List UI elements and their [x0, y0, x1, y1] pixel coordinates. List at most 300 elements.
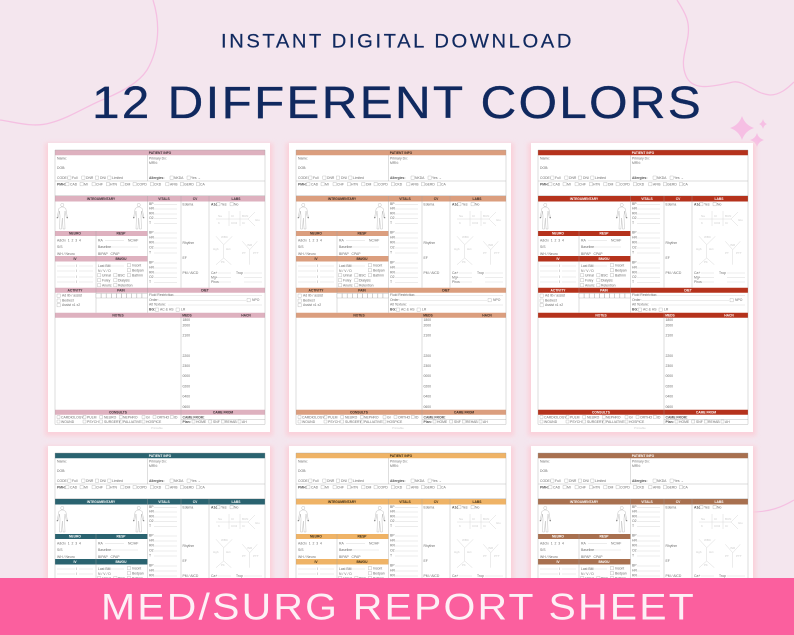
- form labels: [298, 460, 484, 580]
- form labels: PMH:: [57, 486, 66, 490]
- lab fishbone labels: Hgb: [213, 550, 219, 554]
- consults and plan: AH: [725, 420, 730, 424]
- form labels: O2: [390, 216, 395, 220]
- form labels: MRN:: [149, 161, 158, 165]
- form labels: BP: [632, 260, 637, 264]
- form labels: MI: [567, 486, 571, 490]
- form labels: O2: [149, 216, 154, 220]
- section headers: CV: [193, 197, 198, 201]
- form labels: Bathrm: [373, 274, 384, 278]
- lab fishbone labels: Glu: [496, 218, 501, 222]
- form labels: PM / AICD: [182, 271, 199, 275]
- form labels: BG:: [149, 308, 155, 312]
- form labels: DOB:: [540, 469, 548, 473]
- subtitle: INSTANT DIGITAL DOWNLOAD: [221, 30, 574, 52]
- form labels: HR: [149, 236, 154, 240]
- form labels: AC & HS: [401, 308, 415, 312]
- form labels: BIPAP CPAP: [98, 252, 120, 256]
- form labels: MI: [84, 486, 88, 490]
- lab fishbone labels: Glu: [738, 218, 743, 222]
- consults and plan: SURGERY: [587, 420, 604, 424]
- form labels: T: [632, 280, 634, 284]
- section headers: CV: [193, 500, 198, 504]
- section headers: BM/GU: [356, 257, 368, 261]
- form labels: BP: [390, 202, 395, 206]
- consults and plan: [61, 416, 247, 424]
- form labels: Phos: [211, 280, 219, 284]
- lab fishbone labels: Cr: [242, 221, 245, 225]
- lab fishbone labels: K: [459, 524, 461, 528]
- lab fishbone labels: Hct: [226, 550, 231, 554]
- report sheet: terracotta: [286, 143, 514, 436]
- section headers: IV: [73, 560, 77, 564]
- form labels: /: [559, 572, 560, 576]
- med times: [666, 318, 673, 409]
- form labels: DNR: [569, 479, 577, 483]
- report sheet: brick red: [528, 143, 756, 436]
- form labels: Last BM: [339, 264, 352, 268]
- form labels: Rhythm: [424, 544, 435, 548]
- form labels: NKDA: [657, 176, 667, 180]
- form labels: /: [559, 567, 560, 571]
- form labels: HR: [390, 538, 395, 542]
- consults and plan: ORTHO: [640, 416, 653, 420]
- form labels: NPO: [252, 298, 260, 302]
- form labels: DNI: [100, 176, 106, 180]
- lab fishbone labels: Hgb: [696, 550, 702, 554]
- form labels: HR: [632, 266, 637, 270]
- form labels: Retention: [359, 284, 374, 288]
- form labels: DOB:: [298, 166, 306, 170]
- lab fishbone labels: INR: [247, 243, 253, 247]
- form labels: Rhythm: [182, 544, 194, 548]
- form labels: O2: [390, 548, 395, 552]
- lab fishbone labels: Glu: [255, 218, 260, 222]
- lab fishbone labels: Cr: [242, 524, 245, 528]
- form labels: Edema: [182, 506, 193, 510]
- form labels: RA: [581, 238, 586, 242]
- consults and plan: WOUND: [61, 420, 75, 424]
- form labels: NKDA: [174, 479, 184, 483]
- form labels: /: [317, 264, 318, 268]
- form labels: BSC: [601, 274, 609, 278]
- form labels: RA: [339, 238, 344, 242]
- form labels: Foley: [102, 278, 111, 282]
- section headers: INTEGUMENTARY: [87, 197, 116, 201]
- form labels: No: [475, 202, 479, 206]
- lab fishbone labels: Cl: [714, 214, 717, 218]
- form labels: RR: [149, 212, 154, 216]
- section headers: INTEGUMENTARY: [87, 500, 116, 504]
- section headers: DIET: [201, 288, 209, 292]
- form labels: Fluid Restriction:: [632, 293, 657, 297]
- form labels: Last BM: [98, 264, 111, 268]
- section headers: CONSULTS: [592, 410, 611, 414]
- form labels: HR: [149, 510, 154, 514]
- title: 12 DIFFERENT COLORS: [92, 77, 703, 128]
- lab fishbone labels: Cl: [472, 517, 475, 521]
- lab fishbone labels: Hct: [467, 247, 472, 251]
- form labels: No: [717, 506, 721, 510]
- form labels: BP: [149, 534, 154, 538]
- report sheet: amber: [286, 446, 514, 581]
- med times: 2000: [182, 324, 190, 328]
- form labels: RR: [149, 240, 154, 244]
- lab fishbone labels: Plt: [462, 563, 466, 567]
- consults and plan: NEURO: [345, 416, 358, 420]
- section headers: INTEGUMENTARY: [328, 197, 357, 201]
- section headers: [552, 454, 724, 564]
- form labels: Limited: [112, 176, 123, 180]
- form labels: A1c: [452, 202, 458, 206]
- form labels: Ad lib / assist: [62, 294, 82, 298]
- form labels: BIPAP CPAP: [581, 555, 603, 559]
- banner text: MED/SURG REPORT SHEET: [101, 586, 696, 628]
- section headers: CAME FROM: [213, 410, 233, 414]
- form labels: COPD: [137, 182, 147, 186]
- form labels: Urinal: [343, 274, 352, 278]
- consults and plan: NEPHRO: [364, 416, 379, 420]
- lab fishbone labels: K: [701, 524, 703, 528]
- form labels: BP: [390, 505, 395, 509]
- form labels: CODE:: [540, 176, 551, 180]
- section headers: NEURO: [552, 232, 564, 236]
- consults and plan: GI: [629, 416, 633, 420]
- section headers: VITALS: [158, 197, 171, 201]
- form labels: T: [149, 554, 151, 558]
- form labels: Yes →: [191, 176, 201, 180]
- consults and plan: Plan:: [666, 420, 674, 424]
- consults and plan: SNF: [696, 420, 703, 424]
- form labels: Urinal: [585, 274, 594, 278]
- form labels: Primary Dx:: [149, 460, 167, 464]
- form labels: N / V / D: [339, 572, 352, 576]
- consults and plan: NEPHRO: [123, 416, 138, 420]
- lab fishbone labels: Cr: [483, 221, 486, 225]
- form labels: A1c: [211, 506, 217, 510]
- form labels: MRN:: [149, 464, 158, 468]
- form labels: CKD: [637, 486, 645, 490]
- section headers: CAME FROM: [454, 410, 474, 414]
- form labels: Incont: [615, 566, 624, 570]
- med times: 2100: [424, 334, 431, 338]
- decorative curve lower right: [752, 500, 794, 512]
- form labels: PM / AICD: [666, 574, 682, 578]
- form labels: Full: [313, 176, 319, 180]
- section headers: RESP: [117, 232, 126, 236]
- lab fishbone labels: Hct: [226, 247, 231, 251]
- form labels: Order:: [632, 298, 642, 302]
- form labels: O2: [632, 275, 637, 279]
- form labels: CHF: [96, 182, 103, 186]
- form labels: HR: [390, 510, 395, 514]
- form labels: A&Ox 1 2 3 4: [298, 542, 322, 546]
- form labels: DNR: [86, 479, 94, 483]
- report sheet: teal: [45, 446, 273, 581]
- form labels: NC/HF: [128, 542, 138, 546]
- lab fishbone labels: Hct: [709, 247, 714, 251]
- form labels: A&Ox 1 2 3 4: [57, 542, 81, 546]
- form labels: Alt Texture:: [632, 302, 649, 306]
- form labels: BP: [149, 564, 154, 568]
- form labels: COPD: [378, 182, 388, 186]
- section headers: LABS: [232, 500, 241, 504]
- form labels: HTN: [351, 182, 359, 186]
- form labels: NC/HF: [369, 542, 379, 546]
- section headers: HACN: [241, 314, 251, 318]
- form labels: O2: [632, 548, 637, 552]
- form labels: Yes →: [432, 479, 442, 483]
- lab fishbone labels: Glu: [496, 521, 501, 525]
- consults and plan: NEURO: [104, 416, 117, 420]
- form labels: O2: [632, 519, 637, 523]
- form labels: /: [559, 280, 560, 284]
- lab fishbone labels: PTT: [253, 251, 259, 255]
- form labels: MRN:: [390, 464, 399, 468]
- report sheet: brown: [528, 446, 756, 581]
- form labels: /: [76, 269, 77, 273]
- form labels: RA: [98, 238, 103, 242]
- form labels: T: [149, 280, 151, 284]
- section headers: NEURO: [69, 232, 81, 236]
- consults and plan: PALLIATIVE: [606, 420, 625, 424]
- form labels: Edema: [666, 506, 676, 510]
- form labels: CAD: [553, 486, 561, 490]
- form labels: HR: [632, 538, 637, 542]
- form labels: Order:: [149, 298, 159, 302]
- consults and plan: CAME FROM:: [424, 416, 446, 420]
- form labels: LR: [181, 308, 186, 312]
- form labels: RR: [390, 574, 395, 578]
- form labels: Allergies:: [632, 176, 647, 180]
- form labels: Full: [72, 176, 78, 180]
- form labels: DM: [125, 486, 130, 490]
- form labels: DNR: [86, 176, 94, 180]
- form labels: DOB:: [57, 469, 65, 473]
- form labels: Incont: [373, 264, 382, 268]
- form labels: Ca+: [211, 574, 217, 578]
- form labels: CODE:: [57, 176, 68, 180]
- form labels: MI: [325, 486, 329, 490]
- consults and plan: CAME FROM:: [182, 416, 205, 420]
- form labels: PM / AICD: [182, 574, 199, 578]
- section headers: NOTES: [353, 314, 365, 318]
- form labels: /: [76, 280, 77, 284]
- form labels: CAD: [311, 486, 319, 490]
- form labels: /: [76, 275, 77, 279]
- form labels: Dialysis: [118, 278, 130, 282]
- form labels: RA: [581, 542, 586, 546]
- form labels: Bedrest: [303, 298, 315, 302]
- consults and plan: REHAB: [708, 420, 720, 424]
- form labels: BIPAP CPAP: [339, 555, 361, 559]
- form labels: Last BM: [581, 567, 594, 571]
- med times: 0600: [182, 405, 190, 409]
- med times: 0400: [666, 394, 673, 398]
- form labels: Yes: [704, 202, 710, 206]
- form labels: Bedpan: [132, 572, 144, 576]
- section headers: CAME FROM: [696, 410, 716, 414]
- form labels: Bathrm: [132, 576, 143, 580]
- form labels: Last BM: [581, 264, 594, 268]
- lab fishbone labels: Na: [459, 214, 463, 218]
- form labels: HTN: [593, 182, 601, 186]
- lab fishbone labels: WBC: [704, 235, 712, 239]
- lab fishbone labels: BUN: [242, 214, 248, 218]
- form labels: Name:: [57, 460, 67, 464]
- form labels: A&Ox 1 2 3 4: [540, 542, 564, 546]
- section headers: PATIENT INFO: [390, 454, 413, 458]
- lab fishbone labels: Na: [459, 517, 463, 521]
- form labels: Allergies:: [632, 479, 647, 483]
- consults and plan: HOSPICE: [629, 420, 645, 424]
- form labels: WH / Neuro: [298, 555, 316, 559]
- form labels: CKD: [395, 486, 403, 490]
- lab fishbone labels: Hct: [709, 550, 714, 554]
- consults and plan: CARDIOLOGY: [61, 416, 84, 420]
- form labels: O2: [632, 216, 637, 220]
- section headers: [550, 151, 734, 414]
- form labels: BSC: [359, 576, 367, 580]
- form labels: Ca+: [452, 271, 458, 275]
- lab fishbone labels: [213, 517, 260, 567]
- form labels: Name:: [298, 156, 308, 160]
- form labels: BP: [390, 230, 395, 234]
- consults and plan: SURGERY: [345, 420, 362, 424]
- med times: [182, 318, 190, 409]
- form labels: Yes →: [674, 176, 684, 180]
- form labels: Edema: [666, 202, 676, 206]
- med times: 2200: [666, 354, 673, 358]
- med times: 2300: [666, 364, 673, 368]
- section headers: LABS: [715, 500, 724, 504]
- form labels: Primary Dx:: [390, 460, 408, 464]
- form labels: DNI: [583, 479, 589, 483]
- form labels: Assist x1 x2: [62, 303, 80, 307]
- section headers: IV: [314, 257, 318, 261]
- form labels: [540, 460, 726, 580]
- lab fishbone labels: CO2: [231, 524, 238, 528]
- lab fishbone labels: Plt: [704, 260, 708, 264]
- form labels: BG:: [632, 308, 638, 312]
- lab fishbone labels: Hgb: [454, 247, 460, 251]
- form labels: Yes: [221, 506, 227, 510]
- form labels: No: [234, 506, 238, 510]
- lab fishbone labels: BUN: [725, 214, 731, 218]
- form labels: Name:: [298, 460, 308, 464]
- form labels: RR: [390, 514, 395, 518]
- form labels: GERD: [667, 486, 677, 490]
- form labels: RR: [632, 270, 637, 274]
- section headers: PATIENT INFO: [632, 454, 655, 458]
- section headers: BM/GU: [116, 560, 127, 564]
- section headers: PAIN: [358, 288, 366, 292]
- form labels: Full: [72, 479, 78, 483]
- form labels: AFIB: [170, 182, 178, 186]
- section headers: PATIENT INFO: [149, 454, 172, 458]
- form labels: GERD: [184, 486, 194, 490]
- lab fishbone labels: PT: [725, 554, 729, 558]
- form labels: AFIB: [653, 182, 661, 186]
- form labels: MRN:: [632, 464, 641, 468]
- form labels: Trop: [719, 271, 726, 275]
- form labels: PMH:: [298, 486, 307, 490]
- form labels: Yes →: [674, 479, 684, 483]
- form labels: CAD: [70, 486, 78, 490]
- form labels: LR: [664, 308, 669, 312]
- form labels: Fluid Restriction:: [390, 293, 415, 297]
- section headers: RESP: [600, 535, 609, 539]
- form labels: EF: [182, 559, 187, 563]
- form labels: N / V / D: [339, 269, 352, 273]
- med times: 2300: [182, 364, 190, 368]
- form labels: CHF: [337, 182, 344, 186]
- form labels: HR: [632, 206, 637, 210]
- form labels: N / V / D: [581, 269, 594, 273]
- form labels: AFIB: [653, 486, 661, 490]
- lab fishbone labels: WBC: [704, 538, 712, 542]
- form labels: NC/HF: [369, 238, 379, 242]
- form labels: RR: [149, 544, 154, 548]
- form labels: RR: [149, 514, 154, 518]
- form labels: Name:: [57, 156, 67, 160]
- form labels: RR: [390, 212, 395, 216]
- section headers: NEURO: [69, 535, 81, 539]
- form labels: DNI: [341, 479, 347, 483]
- lab fishbone labels: K: [218, 524, 220, 528]
- form labels: Edema: [424, 202, 434, 206]
- form labels: BP: [390, 564, 395, 568]
- section headers: CONSULTS: [109, 410, 128, 414]
- decorative curve left: [0, 0, 158, 125]
- lab fishbone labels: Cl: [231, 214, 234, 218]
- consults and plan: REHAB: [466, 420, 478, 424]
- form labels: Bathrm: [132, 274, 143, 278]
- form labels: T: [390, 524, 392, 528]
- form labels: T: [632, 250, 634, 254]
- form labels: WH / Neuro: [540, 252, 558, 256]
- section headers: MEDS: [423, 314, 434, 318]
- form labels: PMH:: [540, 486, 549, 490]
- consults and plan: WOUND: [302, 420, 316, 424]
- report sheet: dusty rose: [45, 143, 273, 436]
- lab fishbone labels: BUN: [483, 517, 489, 521]
- form labels: DNR: [569, 176, 577, 180]
- form labels: Primary Dx:: [390, 156, 408, 160]
- consults and plan: [302, 416, 488, 424]
- footer: Printable: [392, 426, 404, 430]
- form labels: BP: [632, 534, 637, 538]
- form labels: HTN: [351, 486, 359, 490]
- med times: 0200: [666, 384, 673, 388]
- lab fishbone labels: [696, 214, 743, 264]
- form labels: S/S: [298, 548, 304, 552]
- footer: Printable: [151, 426, 163, 430]
- form labels: CHF: [579, 486, 586, 490]
- form labels: S/S: [57, 548, 63, 552]
- section headers: RESP: [600, 232, 609, 236]
- form labels: GERD: [425, 182, 435, 186]
- lab fishbone labels: INR: [488, 243, 494, 247]
- form labels: Anuric: [585, 284, 595, 288]
- form labels: T: [390, 250, 392, 254]
- form labels: NC/HF: [128, 238, 138, 242]
- form labels: T: [632, 524, 634, 528]
- form labels: RR: [390, 544, 395, 548]
- form labels: CODE:: [540, 479, 551, 483]
- section headers: VITALS: [399, 500, 412, 504]
- med times: 0400: [182, 394, 190, 398]
